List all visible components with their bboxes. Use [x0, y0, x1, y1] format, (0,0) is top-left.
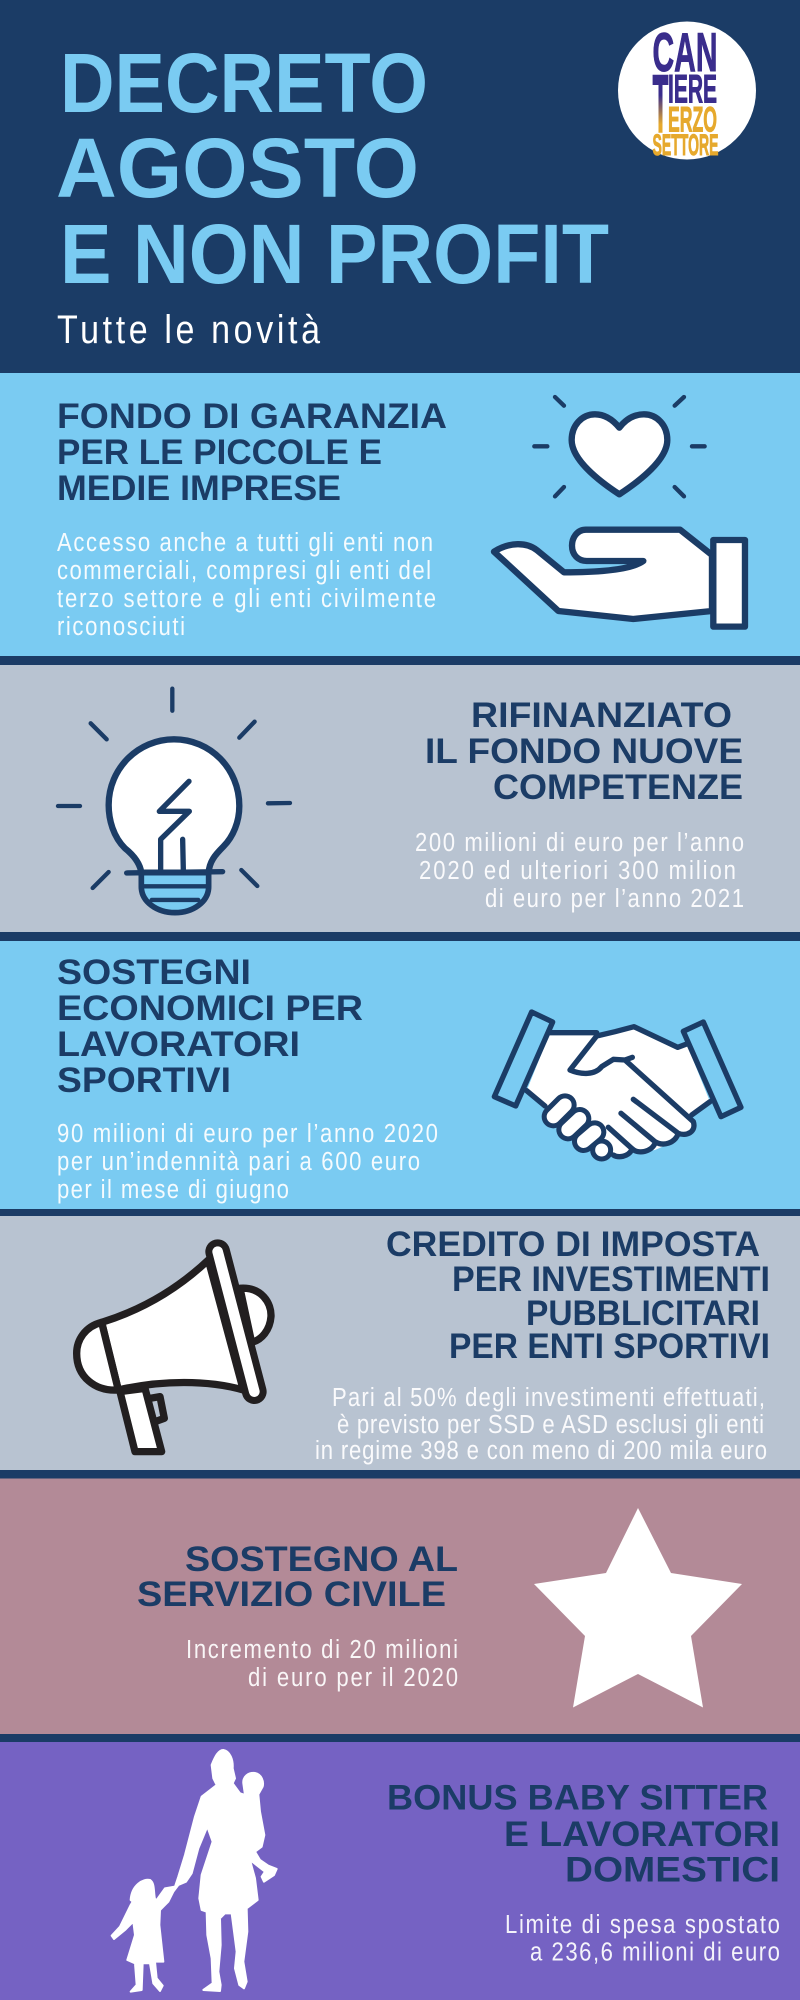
- heading: sostegni: LAVORATORI: [57, 1025, 300, 1064]
- panel: lavoratori sportivi: [0, 941, 800, 1209]
- logo: Cantiere Terzo Settore: SETTORE: [652, 129, 718, 162]
- icon: megaphone: [77, 1252, 271, 1452]
- heading: sostegni: ECONOMICI PER: [57, 989, 363, 1028]
- logo: Cantiere Terzo Settore: CAN: [652, 21, 718, 83]
- panel: fondo nuove competenze: [0, 665, 800, 932]
- heading: credito di imposta: CREDITO DI IMPOSTA: [386, 1225, 760, 1264]
- icon: mother and children silhouette: [112, 1750, 277, 1992]
- text: accesso: Accesso anche a tutti gli enti non: [57, 528, 433, 557]
- heading: sostegno al servizio civile: SOSTEGNO AL: [185, 1540, 458, 1579]
- text: 200 milioni: [415, 828, 744, 913]
- text: incremento: di euro per il 2020: [248, 1663, 458, 1692]
- heading: rifinanziato: [425, 696, 743, 807]
- logo: Cantiere Terzo Settore: ERZO: [668, 100, 717, 140]
- title: E NON PROFIT: [60, 207, 609, 301]
- text: incremento: [186, 1635, 458, 1692]
- icon: hand holding heart: [494, 397, 745, 627]
- text: accesso: commerciali, compresi gli enti del: [57, 556, 431, 585]
- heading: fondo di garanzia: FONDO DI GARANZIA: [57, 397, 447, 436]
- logo: Cantiere Terzo Settore: [618, 21, 756, 162]
- text: accesso: [57, 528, 436, 641]
- heading: credito di imposta: PUBBLICITARI: [526, 1294, 760, 1333]
- text: accesso: terzo settore e gli enti civilmente: [57, 584, 436, 613]
- heading: bonus baby sitter: BONUS BABY SITTER: [387, 1778, 768, 1818]
- text: pari al 50%: [315, 1383, 767, 1465]
- logo: Cantiere Terzo Settore: IERE: [668, 68, 717, 112]
- text: pari al 50%: in regime 398 e con meno di 200 mila euro: [315, 1436, 767, 1465]
- heading: rifinanziato: COMPETENZE: [493, 768, 743, 807]
- heading: rifinanziato: IL FONDO NUOVE: [425, 732, 743, 771]
- text: incremento: Incremento di 20 milioni: [186, 1635, 458, 1664]
- icon: handshake: [494, 1012, 741, 1159]
- icon: star: [534, 1508, 742, 1708]
- subtitle: Tutte le novità: [57, 306, 320, 352]
- text: limite di spesa: Limite di spesa spostato: [505, 1910, 780, 1939]
- panel: header: [56, 21, 756, 352]
- text: accesso: riconosciuti: [57, 612, 185, 641]
- title: DECRETO: [60, 36, 428, 130]
- heading: fondo di garanzia: PER LE PICCOLE E: [57, 433, 382, 472]
- title: [56, 36, 609, 301]
- heading: sostegni: SPORTIVI: [57, 1061, 231, 1100]
- heading: sostegni: [57, 953, 363, 1100]
- heading: bonus baby sitter: E LAVORATORI: [504, 1815, 780, 1854]
- text: pari al 50%: è previsto per SSD e ASD esclusi gli enti: [337, 1410, 764, 1439]
- heading: fondo di garanzia: MEDIE IMPRESE: [57, 469, 341, 508]
- text: limite di spesa: a 236,6 milioni di euro: [530, 1938, 780, 1967]
- title: AGOSTO: [56, 121, 419, 215]
- panel: servizio civile: [0, 1478, 800, 1734]
- heading: fondo di garanzia: [57, 397, 447, 508]
- text: 200 milioni: 200 milioni di euro per l’anno: [415, 828, 744, 857]
- text: pari al 50%: Pari al 50% degli investimenti effettuati,: [332, 1383, 765, 1412]
- text: 90 milioni: per il mese di giugno: [57, 1175, 289, 1204]
- text: 90 milioni: [57, 1119, 438, 1204]
- heading: bonus baby sitter: [387, 1778, 780, 1890]
- panel: bonus baby sitter: [0, 1742, 800, 2000]
- logo: Cantiere Terzo Settore: T: [652, 57, 668, 150]
- heading: sostegno al servizio civile: SERVIZIO CIVILE: [137, 1575, 446, 1614]
- panel: credito di imposta: [0, 1216, 800, 1470]
- heading: sostegno al servizio civile: [137, 1540, 458, 1614]
- panel: fondo di garanzia: [0, 373, 800, 656]
- heading: sostegni: SOSTEGNI: [57, 953, 251, 992]
- heading: credito di imposta: [386, 1225, 770, 1366]
- text: 200 milioni: 2020 ed ulteriori 300 milion: [419, 856, 736, 885]
- text: limite di spesa: [505, 1910, 780, 1967]
- heading: credito di imposta: PER INVESTIMENTI: [452, 1260, 770, 1299]
- heading: credito di imposta: PER ENTI SPORTIVI: [449, 1327, 770, 1366]
- heading: rifinanziato: RIFINANZIATO: [471, 696, 732, 735]
- text: 90 milioni: per un’indennità pari a 600 euro: [57, 1147, 420, 1176]
- text: 90 milioni: 90 milioni di euro per l’anno 2020: [57, 1119, 438, 1148]
- heading: bonus baby sitter: DOMESTICI: [565, 1850, 780, 1890]
- icon: light bulb: [58, 689, 290, 913]
- text: 200 milioni: di euro per l’anno 2021: [485, 884, 744, 913]
